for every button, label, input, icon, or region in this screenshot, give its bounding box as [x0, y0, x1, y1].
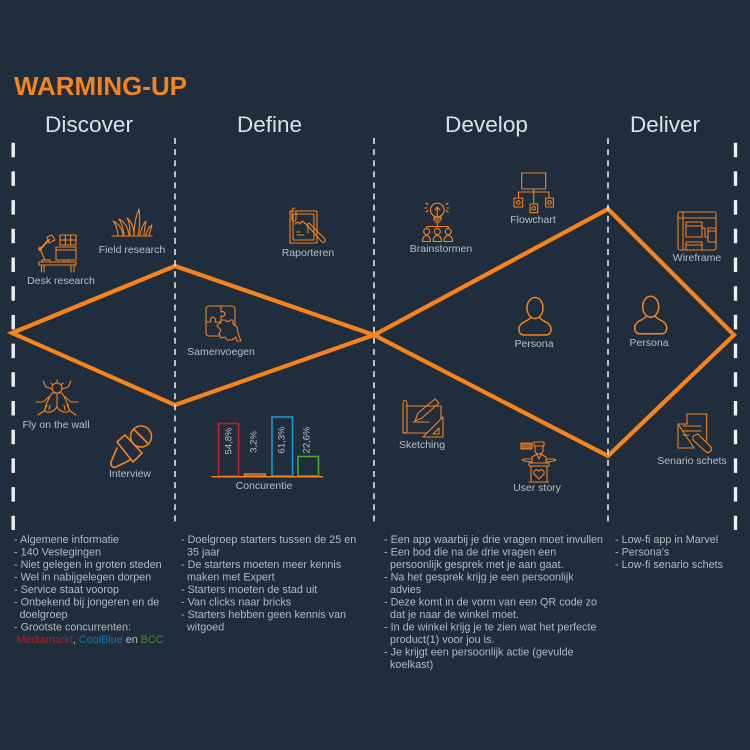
text block: deliver: - Persona's	[615, 546, 670, 558]
label: persona deliver: Persona	[629, 337, 669, 349]
text block: discover: doelgroep	[20, 609, 68, 621]
text block: develop	[384, 534, 603, 671]
label: flowchart: Flowchart	[510, 214, 556, 226]
label: persona develop: Persona	[514, 338, 554, 350]
text block: discover: - Algemene informatie	[14, 534, 119, 546]
column headings: Deliver	[630, 112, 700, 137]
text block: develop: dat je naar de winkel moet.	[390, 609, 519, 621]
text block: deliver: - Low-fi senario schets	[615, 559, 724, 571]
text block: define: - Doelgroep starters tussen de 25 en	[181, 534, 356, 546]
label: interview: Interview	[109, 468, 151, 480]
text block: discover: - Wel in nabijgelegen dorpen	[14, 572, 151, 584]
icon: raporteren document	[290, 208, 325, 243]
text block: discover: - Service staat voorop	[14, 584, 119, 596]
column headings: Develop	[445, 112, 528, 137]
icon: fly on the wall	[36, 380, 78, 415]
column dividers	[13, 138, 735, 530]
icon: flowchart	[514, 173, 553, 213]
bar chart: concurentie: 61,3%	[276, 426, 288, 453]
text block: define	[181, 534, 356, 634]
label: field research: Field research	[99, 244, 165, 256]
text block: develop: - Deze komt in de vorm van een QR code zo	[384, 596, 597, 608]
icon: persona develop	[519, 298, 551, 335]
column headings: Define	[237, 112, 302, 137]
bar chart: concurentie: 22,6%	[302, 426, 312, 453]
text block: develop: - Een app waarbij je drie vragen moet invullen	[384, 534, 603, 546]
text block: define: - Starters hebben geen kennis van	[181, 609, 346, 621]
label: samenvoegen: Samenvoegen	[187, 346, 255, 358]
label: fly on the wall: Fly on the wall	[22, 419, 90, 431]
icon: persona deliver	[635, 296, 667, 334]
text block: develop: - Je krijgt een persoonlijk actie (gevulde	[384, 646, 574, 658]
text block: define: 35 jaar	[187, 546, 220, 558]
text block: develop: - Na het gesprek krijg je een persoonlijk	[384, 572, 574, 584]
icon: interview microphone	[111, 426, 152, 467]
column headings: Discover	[45, 112, 133, 137]
text block: develop: - In de winkel krijg je te zien wat het perfecte	[384, 622, 596, 634]
text block: develop: - Een bod die na de drie vragen een	[384, 546, 556, 558]
label: brainstormen: Brainstormen	[410, 243, 472, 255]
text block: define: witgoed	[186, 622, 224, 634]
icon: user story speaker	[521, 442, 556, 482]
icon: wireframe	[678, 212, 716, 250]
text block: define: - Van clicks naar bricks	[181, 596, 292, 608]
label: concurentie: Concurentie	[236, 480, 292, 492]
label: sketching: Sketching	[399, 439, 445, 451]
label: senario schets: Senario schets	[657, 455, 727, 467]
label: desk research: Desk research	[27, 275, 95, 287]
icon: brainstormen	[422, 203, 453, 242]
text block: develop: product(1) voor jou is.	[390, 634, 494, 646]
column headings	[45, 112, 700, 137]
text block: discover: Mediamarkt, CoolBlue en BCC	[16, 634, 164, 646]
label: raporteren: Raporteren	[282, 247, 334, 259]
text block: develop: koelkast)	[390, 659, 433, 671]
label: user story: User story	[513, 482, 562, 494]
bar chart: concurentie: 54,8%	[224, 427, 234, 454]
icon: sketching	[403, 399, 443, 437]
icon: samenvoegen puzzle	[206, 306, 241, 341]
text block: define: maken met Expert	[187, 572, 275, 584]
text block: deliver: - Low-fi app in Marvel	[615, 534, 718, 546]
icon: senario schets	[678, 414, 712, 453]
text block: develop: advies	[390, 584, 422, 596]
label: wireframe: Wireframe	[673, 252, 721, 264]
text block: discover: - Grootste concurrenten:	[14, 622, 131, 634]
text block: discover: - Onbekend bij jongeren en de	[14, 596, 159, 608]
text block: define: - Starters moeten de stad uit	[181, 584, 317, 596]
text block: discover: - Niet gelegen in groten steden	[14, 559, 162, 571]
bar chart: concurentie: 3,2%	[248, 431, 260, 453]
icon: desk research	[39, 235, 76, 272]
text block: discover	[14, 534, 164, 646]
bar chart: concurentie	[212, 417, 323, 477]
text block: develop: persoonlijk gesprek met je aan gaat.	[390, 559, 563, 571]
text block: discover: - 140 Vestegingen	[14, 546, 101, 558]
text block: define: - De starters moeten meer kennis	[181, 559, 342, 571]
title: WARMING-UP	[14, 71, 187, 101]
diamond process lines	[12, 209, 734, 456]
icon: field research grass	[112, 209, 152, 236]
text block: deliver	[615, 534, 724, 571]
